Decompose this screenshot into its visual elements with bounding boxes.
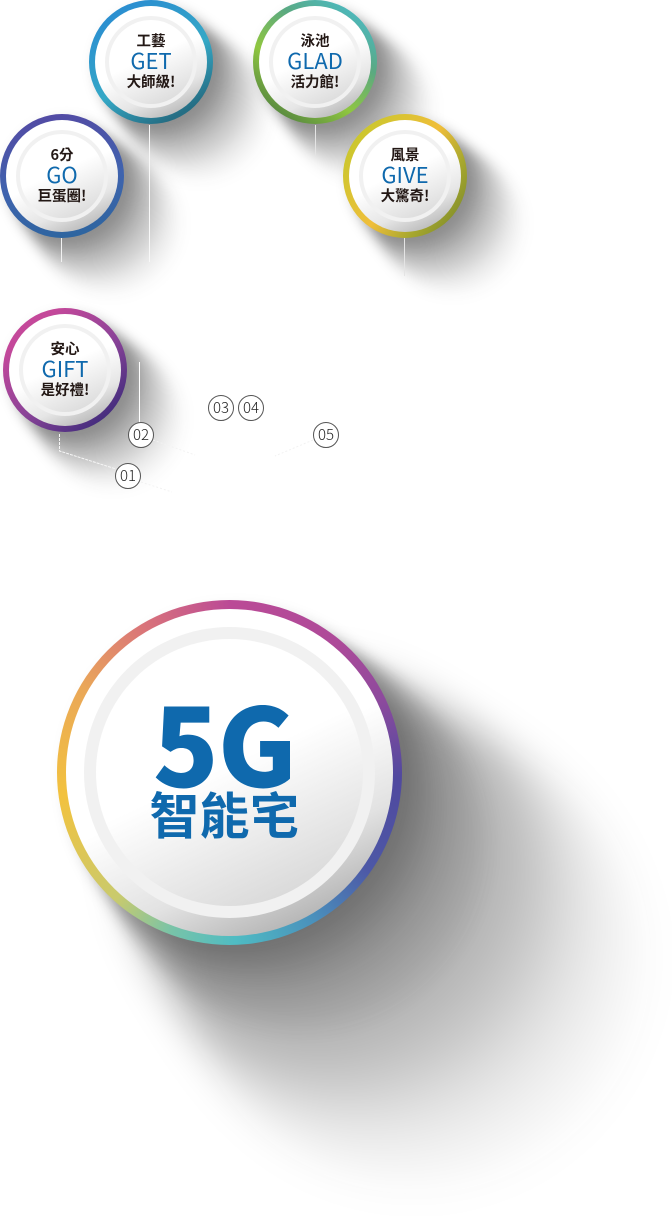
main badge: 5G 智能宅: 智能宅 xyxy=(150,777,300,849)
badge: GLAD xyxy=(253,0,377,124)
badge: GET: GET xyxy=(130,44,172,76)
badge: GIFT xyxy=(3,308,127,432)
number marker 02: 02 xyxy=(133,424,149,445)
number marker 05: 05 xyxy=(318,424,334,445)
badge: GIVE: 風景 xyxy=(390,144,420,165)
badge: GET xyxy=(89,0,213,124)
badge: GO xyxy=(0,114,124,238)
badge: GLAD: GLAD xyxy=(287,44,343,76)
badge: GLAD: 泳池 xyxy=(300,30,330,51)
number marker 03 xyxy=(208,395,234,421)
main badge: 5G 智能宅: 5G xyxy=(153,663,296,819)
badge: GET: 大師級! xyxy=(127,71,175,92)
main badge: 5G 智能宅 xyxy=(57,600,402,945)
number marker 01: 01 xyxy=(120,465,136,486)
number marker 04 xyxy=(238,395,264,421)
badge: GET: 工藝 xyxy=(136,30,166,51)
number marker 03: 03 xyxy=(213,397,229,418)
badge: GIFT: GIFT xyxy=(42,352,88,384)
badge: GO: 巨蛋圈! xyxy=(38,185,86,206)
number marker 05 xyxy=(313,422,339,448)
number marker 02 xyxy=(128,422,154,448)
badge: GIVE xyxy=(343,114,467,238)
badge: GO: 6分 xyxy=(50,144,74,165)
badge: GIVE: GIVE xyxy=(381,158,429,190)
badge: GIFT: 是好禮! xyxy=(41,379,89,400)
badge: GO: GO xyxy=(46,158,78,190)
number marker 04: 04 xyxy=(243,397,259,418)
badge: GIVE: 大驚奇! xyxy=(381,185,429,206)
number marker 01 xyxy=(115,463,141,489)
badge: GLAD: 活力館! xyxy=(291,71,339,92)
badge: GIFT: 安心 xyxy=(50,338,80,359)
